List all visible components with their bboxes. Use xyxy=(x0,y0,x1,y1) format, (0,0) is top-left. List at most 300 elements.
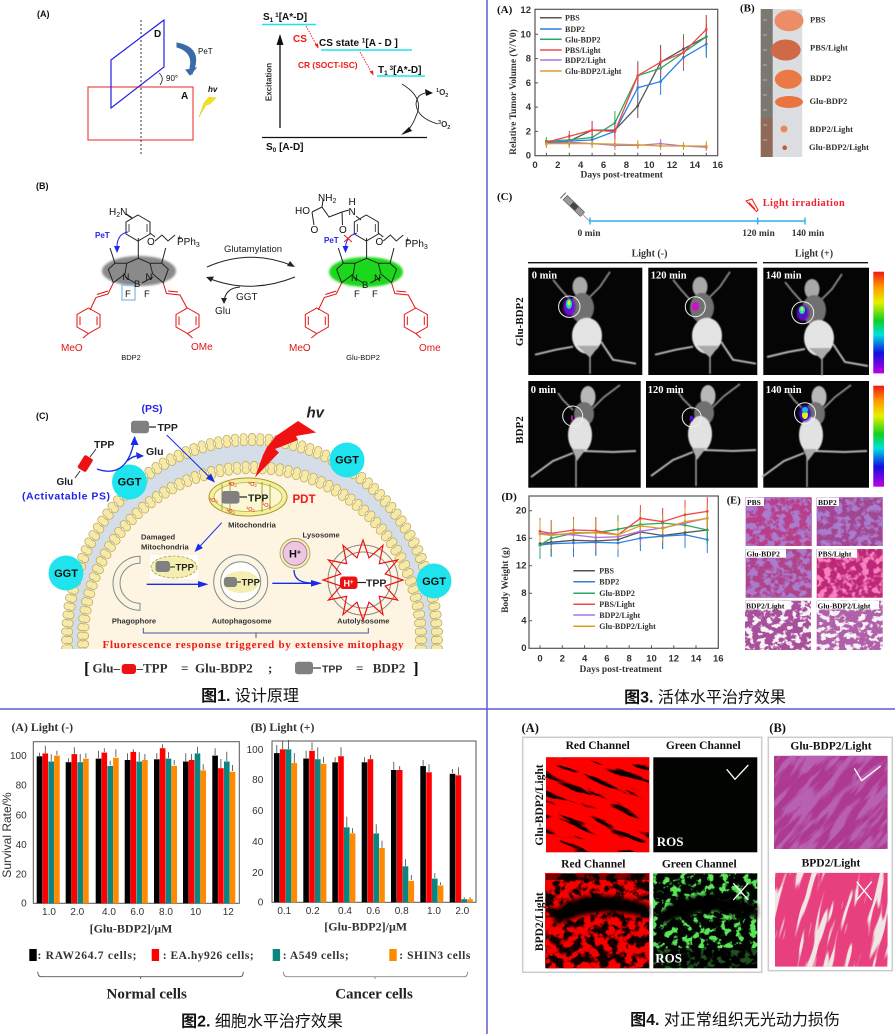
chart: body weight: 12 xyxy=(669,654,679,664)
chart legend xyxy=(540,14,622,76)
molecule BDP2: N xyxy=(120,207,127,218)
chart: body weight: 6 xyxy=(604,654,610,664)
mitochondria with singlet oxygen: 2 xyxy=(269,504,272,509)
mitochondria with singlet oxygen: 1 xyxy=(246,505,249,510)
formula legend xyxy=(84,659,419,678)
panel B label: (B) xyxy=(769,721,786,735)
bar chart: light off: 8.0 xyxy=(159,907,173,918)
mitochondria with singlet oxygen: TPP xyxy=(248,492,268,504)
bar chart: light on: 1.0 xyxy=(427,906,441,917)
chart legend: Glu-BDP2 xyxy=(565,35,601,44)
diagram: orthogonal donor acceptor planes xyxy=(88,20,213,154)
mitochondria with singlet oxygen: 2 xyxy=(235,483,238,488)
activatable PS converted to PS: Glu xyxy=(56,477,73,488)
histology: Glu-BDP2 xyxy=(746,549,812,598)
phagophore xyxy=(113,556,140,610)
GGT enzymes xyxy=(48,442,452,598)
bar chart: light on xyxy=(247,740,476,934)
autophagosome xyxy=(214,555,268,609)
molecule BDP2: O xyxy=(147,237,155,248)
chart: body weight: 4 xyxy=(521,616,527,626)
panel A frame and ROS images xyxy=(522,736,762,973)
molecule Glu-BDP2: 2 xyxy=(332,198,336,205)
panel E label: (E) xyxy=(727,496,741,506)
molecule Glu-BDP2: HO xyxy=(295,206,310,217)
molecule BDP2: + xyxy=(177,233,182,242)
autolysosome with fluorescence burst: TPP xyxy=(366,578,386,590)
chart legend: Glu-BDP2/Light xyxy=(599,622,656,631)
legend cell lines: : SHIN3 cells xyxy=(399,950,471,962)
molecule Glu-BDP2: N xyxy=(351,273,358,284)
chart legend: PBS xyxy=(599,566,615,576)
bar chart: light on: 100 xyxy=(247,745,264,756)
legend cell lines: : RAW264.7 cells; xyxy=(38,950,136,962)
molecule Glu-BDP2: O xyxy=(339,225,347,236)
GGT enzymes: GGT xyxy=(335,454,359,466)
formula legend: = xyxy=(181,661,188,676)
mitochondria with singlet oxygen: 2 xyxy=(255,483,258,488)
bar chart: light on: 20 xyxy=(252,868,264,879)
mitochondria with singlet oxygen: 1 xyxy=(262,501,265,506)
molecule Glu-BDP2: + xyxy=(405,235,410,244)
panel C treatment timeline: Light irradiation xyxy=(763,198,845,209)
lysosome: + xyxy=(297,550,301,556)
chart: relative tumor volume: 2 xyxy=(555,160,560,171)
mitochondria with singlet oxygen xyxy=(209,478,287,516)
molecule Glu-BDP2: F xyxy=(372,289,378,300)
icon: laser pointer xyxy=(746,199,758,212)
panel C treatment timeline xyxy=(497,191,868,444)
histology: Glu-BDP2/Light xyxy=(817,601,883,650)
formula legend: –TPP xyxy=(136,661,168,676)
imaging: BDP2 120 min: 120 min xyxy=(648,385,684,396)
molecule BDP2: F xyxy=(144,289,150,300)
panel A frame and ROS images: BPD2/Light xyxy=(534,892,546,951)
chart: relative tumor volume: 16 xyxy=(712,160,723,171)
chart: body weight: Body Weight (g) xyxy=(500,547,511,613)
histology: BDP2/Light xyxy=(745,601,811,650)
chart: body weight: 12 xyxy=(516,560,526,572)
group bracket cancer cells xyxy=(283,972,468,1002)
panel C treatment timeline: Light (-) xyxy=(632,248,667,260)
chart: relative tumor volume: 14 xyxy=(690,160,701,171)
imaging: Glu-BDP2 0 min: 0 min xyxy=(532,270,557,282)
lysosome: Lysosome xyxy=(302,530,340,540)
panel: figure 4 no dark phototoxicity xyxy=(522,723,893,1027)
legend cell lines: : EA.hy926 cells; xyxy=(163,950,254,962)
fluorescence caption: Fluorescence response triggered by extensive mitophagy xyxy=(102,639,404,651)
panel C treatment timeline: (C) xyxy=(497,191,513,203)
reaction arrows glutamylation and GGT: GGT xyxy=(236,292,258,303)
energy level diagram: 1 xyxy=(436,88,439,94)
energy level diagram: 2 xyxy=(445,93,448,99)
chart: relative tumor volume: 4 xyxy=(578,160,584,171)
panel B excised tumors: BDP2 xyxy=(810,73,831,83)
histology: PBS/Light: PBS/Light xyxy=(818,550,852,559)
bar chart: light off: [Glu-BDP2]/μM xyxy=(90,922,172,936)
organelle labels: Autophagosome xyxy=(212,616,272,625)
imaging: BDP2 0 min: 0 min xyxy=(531,385,556,396)
formula legend: BDP2 xyxy=(373,661,405,676)
damaged mitochondrion xyxy=(150,555,198,579)
molecule BDP2: H xyxy=(109,207,116,218)
energy level diagram: O xyxy=(441,120,447,129)
chart legend: BDP2 xyxy=(599,578,619,586)
mitochondria with singlet oxygen: 2 xyxy=(216,499,219,504)
panel B excised tumors: Glu-BDP2 xyxy=(810,96,847,106)
icon: red lightning hv xyxy=(255,404,326,478)
energy level diagram: 1 xyxy=(362,38,366,44)
bar chart: light on: 0.4 xyxy=(338,906,352,917)
bar chart: light on: 0 xyxy=(258,898,264,908)
molecule BDP2: MeO xyxy=(61,343,83,354)
molecule Glu-BDP2: Glu-BDP2 xyxy=(346,353,380,362)
panel A frame and ROS images: Green Channel xyxy=(662,858,737,870)
chart: body weight: 14 xyxy=(691,654,702,664)
imaging: BDP2 120 min xyxy=(646,381,758,488)
energy level diagram: T xyxy=(378,65,384,76)
organelle labels: Autolysosome xyxy=(337,616,389,625)
bar chart: light off: 4.0 xyxy=(102,907,116,918)
autolysosome with fluorescence burst xyxy=(323,540,403,620)
energy level diagram: [A*-D] xyxy=(393,65,421,76)
icon: syringe xyxy=(560,193,592,224)
imaging: BDP2 0 min xyxy=(528,381,641,488)
chart legend: PBS/Light xyxy=(599,600,635,609)
chart: body weight: 8 xyxy=(521,588,526,599)
color scale bottom xyxy=(873,386,884,487)
formula legend: ] xyxy=(413,659,419,678)
chart: body weight xyxy=(500,496,724,675)
panel C treatment timeline: BDP2 xyxy=(514,416,526,444)
chart legend: Glu-BDP2/Light xyxy=(565,67,622,76)
caption figure 4: 图4. 对正常组织无光动力损伤 xyxy=(630,1011,840,1029)
damaged mitochondrion: TPP xyxy=(176,562,195,574)
molecule BDP2: 2 xyxy=(116,212,120,219)
chart: relative tumor volume: Relative Tumor Volume (V/V0) xyxy=(508,29,519,155)
mitochondria with singlet oxygen: O xyxy=(211,498,216,504)
energy level diagram: CS xyxy=(293,34,307,45)
lysosome: H xyxy=(289,548,297,560)
panel B excised tumors: PBS xyxy=(810,14,826,24)
chart: body weight: 20 xyxy=(516,506,526,516)
histology: Glu-BDP2/Light: Glu-BDP2/Light xyxy=(818,602,871,610)
reaction arrows glutamylation and GGT xyxy=(206,244,295,317)
confocal: red channel bottom xyxy=(545,873,649,968)
bar chart: light off: 20 xyxy=(16,870,27,880)
group bracket normal cells xyxy=(38,972,243,1002)
icon: light bolt hv xyxy=(199,85,218,117)
chart: body weight: 0 xyxy=(521,643,526,654)
chart: relative tumor volume: Days post-treatment xyxy=(580,170,664,180)
bar chart: light on: 0.1 xyxy=(277,906,292,917)
chart: relative tumor volume: 12 xyxy=(520,5,531,16)
molecule BDP2: OMe xyxy=(191,342,213,353)
caption figure 1: 图1. 设计原理 xyxy=(201,687,299,705)
diagram: orthogonal donor acceptor planes: 90° xyxy=(166,74,178,83)
chart: relative tumor volume: 8 xyxy=(624,160,629,171)
confocal: red channel top xyxy=(546,757,650,852)
molecule Glu-BDP2: F xyxy=(354,289,360,300)
panel B excised tumors: PBS/Light xyxy=(810,42,848,52)
panel B frame and histology: Glu-BDP2/Light xyxy=(790,740,872,752)
chart: relative tumor volume: 2 xyxy=(526,126,531,138)
imaging: Glu-BDP2 120 min xyxy=(648,268,757,375)
panel B excised tumors: (B) xyxy=(740,2,755,14)
mitochondria with singlet oxygen: 1 xyxy=(248,480,251,485)
panel A frame and ROS images: Glu-BDP2/Light xyxy=(534,764,546,846)
imaging: Glu-BDP2 140 min xyxy=(763,268,869,376)
molecule Glu-BDP2: Ome xyxy=(419,343,441,354)
panel label B: (B) xyxy=(36,181,48,191)
chart: body weight: 16 xyxy=(516,533,526,544)
chart: body weight: Days post-treatment xyxy=(579,665,663,675)
energy level diagram: 3 xyxy=(438,120,441,126)
autophagosome: TPP xyxy=(242,578,261,588)
molecule Glu-BDP2: MeO xyxy=(289,343,311,354)
formula legend: Glu– xyxy=(92,661,120,676)
label PDT: PDT xyxy=(292,494,316,506)
panel C treatment timeline: Glu-BDP2 xyxy=(514,297,526,346)
molecule BDP2 xyxy=(61,207,213,362)
molecule Glu-BDP2: B xyxy=(362,280,368,291)
legend cell lines xyxy=(29,949,471,962)
energy level diagram: Excitation xyxy=(264,63,274,101)
molecule Glu-BDP2: PeT xyxy=(324,236,339,245)
molecule BDP2: F xyxy=(125,289,131,300)
icon: red lightning hv: hv xyxy=(306,404,326,422)
panel: figure 1 design principle xyxy=(22,10,452,703)
mitochondria with singlet oxygen: O xyxy=(264,503,269,509)
activatable PS converted to PS: TPP xyxy=(94,439,114,451)
panel A label: (A) xyxy=(522,721,539,735)
energy level diagram: S xyxy=(263,12,270,23)
formula legend: Glu-BDP2 xyxy=(195,661,253,676)
bar chart: light off xyxy=(0,742,239,936)
panel B excised tumors: Glu-BDP2/Light xyxy=(809,142,869,152)
arrow to damaged mitochondria xyxy=(194,523,222,552)
chart: relative tumor volume: 8 xyxy=(526,54,531,64)
chart: relative tumor volume: 4 xyxy=(526,102,532,113)
histology: PBS xyxy=(746,497,812,546)
energy level diagram: S xyxy=(266,142,273,153)
cell membrane lipid bilayer xyxy=(61,433,443,649)
bar chart: light on: 2.0 xyxy=(455,906,470,917)
chart: relative tumor volume: 10 xyxy=(644,160,654,171)
chart: body weight: 2 xyxy=(560,654,565,664)
GGT enzymes: GGT xyxy=(118,476,142,488)
chart legend: Glu-BDP2 xyxy=(599,589,635,598)
bar chart: light off: 100 xyxy=(10,751,27,762)
chart legend: BDP2/Light xyxy=(565,56,606,65)
energy level diagram: [A - D ] xyxy=(365,38,398,49)
color scale top xyxy=(873,272,884,373)
chart: relative tumor volume: 12 xyxy=(667,160,677,171)
panel A frame and ROS images: Red Channel xyxy=(561,858,625,870)
GGT enzymes: GGT xyxy=(422,576,446,588)
bar chart: light off: 1.0 xyxy=(42,907,56,918)
bar chart: light off: 2.0 xyxy=(70,907,85,918)
molecule BDP2: PeT xyxy=(95,231,110,240)
imaging: Glu-BDP2 120 min: 120 min xyxy=(651,270,687,282)
panel B frame and histology xyxy=(768,736,893,972)
arrows to autolysosome xyxy=(272,570,322,587)
chart: body weight: 16 xyxy=(713,654,724,664)
organelle labels: Phagophore xyxy=(112,616,156,625)
histology: BPD2/Light heart xyxy=(775,872,888,967)
panel D label: (D) xyxy=(502,491,517,503)
formula legend: ; xyxy=(268,661,272,676)
energy level diagram: [A-D] xyxy=(276,142,304,153)
mitochondria with singlet oxygen: 1 xyxy=(228,480,231,485)
bar chart: light off: 80 xyxy=(16,780,27,792)
label mitochondria: Mitochondria xyxy=(228,520,277,530)
energy level diagram xyxy=(262,12,450,154)
chart legend xyxy=(573,566,656,631)
GGT enzymes: GGT xyxy=(54,568,78,580)
panel C treatment timeline: 120 min xyxy=(742,229,775,239)
energy level diagram: 3 xyxy=(388,65,394,72)
activatable PS converted to PS: (Activatable PS) xyxy=(22,490,110,502)
mitochondria with singlet oxygen: O xyxy=(228,509,233,515)
panel C treatment timeline: 0 min xyxy=(578,229,601,239)
chart: body weight: 8 xyxy=(627,654,632,664)
group bracket normal cells: Normal cells xyxy=(107,986,187,1002)
bar chart: light off: 12 xyxy=(223,907,234,918)
confocal: green channel bottom xyxy=(653,873,757,968)
molecule BDP2: BDP2 xyxy=(121,353,141,362)
molecule Glu-BDP2 xyxy=(289,193,441,362)
legend cell lines: : A549 cells; xyxy=(283,950,349,962)
bar chart: light off: 60 xyxy=(16,810,27,822)
activatable PS converted to PS: (PS) xyxy=(142,403,162,415)
bar chart: light off: 40 xyxy=(16,840,27,851)
energy level diagram: 2 xyxy=(447,125,450,131)
mitochondria with singlet oxygen: O xyxy=(248,507,253,513)
bar chart: light off: 6.0 xyxy=(130,907,145,918)
lysosome xyxy=(280,530,340,568)
chart legend: PBS xyxy=(565,14,580,22)
diagram: orthogonal donor acceptor planes: A xyxy=(181,91,188,102)
mitochondria with singlet oxygen: 2 xyxy=(233,510,236,515)
bar chart: light on: 0.8 xyxy=(395,906,409,917)
activatable PS converted to PS: TPP xyxy=(158,422,178,434)
energy level diagram: CS state xyxy=(319,38,359,49)
bar chart: light on: 0.6 xyxy=(366,906,381,917)
panel C treatment timeline: Light (+) xyxy=(795,248,833,260)
formula legend: [ xyxy=(84,659,90,678)
icon: light bolt hv: hv xyxy=(208,85,218,94)
energy level diagram: 0 xyxy=(273,147,277,154)
histology: PBS: PBS xyxy=(747,498,761,507)
panel label C: (C) xyxy=(36,411,48,421)
bar chart: light on: 40 xyxy=(252,837,264,848)
panel label A: (A) xyxy=(37,9,50,19)
panel B excised tumors xyxy=(740,2,869,157)
diagram: orthogonal donor acceptor planes: D xyxy=(154,29,161,40)
autolysosome with fluorescence burst: H xyxy=(343,578,350,588)
label damaged mitochondria: Damaged xyxy=(141,532,175,542)
caption figure 3: 图3. 活体水平治疗效果 xyxy=(624,688,786,706)
confocal: green channel bottom: ROS xyxy=(655,951,682,966)
chart: body weight: 10 xyxy=(646,654,657,664)
reaction arrows glutamylation and GGT: Glu xyxy=(215,306,231,317)
reaction arrows glutamylation and GGT: Glutamylation xyxy=(224,244,282,255)
molecule Glu-BDP2: 3 xyxy=(424,244,428,251)
activatable PS converted to PS xyxy=(22,403,215,502)
molecule BDP2: N xyxy=(146,272,152,283)
chart: body weight: 4 xyxy=(582,654,588,664)
diagram: orthogonal donor acceptor planes: PeT xyxy=(198,47,213,56)
confocal: green channel top: ROS xyxy=(657,834,683,849)
molecule Glu-BDP2: PPh xyxy=(405,239,424,250)
chart: relative tumor volume: 0 xyxy=(526,150,531,162)
panel C treatment timeline: 140 min xyxy=(792,229,825,239)
panel B title: (B) Light (+) xyxy=(251,720,315,734)
molecule Glu-BDP2: N xyxy=(374,273,381,284)
imaging: Glu-BDP2 0 min xyxy=(528,268,642,375)
histology: Glu-BDP2/Light heart xyxy=(774,756,888,849)
energy level diagram: 1 xyxy=(273,12,279,19)
histology: BDP2: BDP2 xyxy=(818,498,837,507)
molecule BDP2: N xyxy=(122,272,130,283)
panel A frame and ROS images: Green Channel xyxy=(666,740,741,752)
chart: body weight: 0 xyxy=(537,654,543,664)
panel A label: (A) xyxy=(497,4,513,16)
energy level diagram: [A*-D] xyxy=(279,12,307,23)
molecule BDP2: PPh xyxy=(177,237,196,248)
icon: PeT curved arrow xyxy=(177,43,196,75)
molecule Glu-BDP2: NH xyxy=(318,193,332,204)
arrow phagophore to autophagosome xyxy=(147,581,208,588)
autolysosome with fluorescence burst: + xyxy=(350,580,354,586)
bar chart: light on: 80 xyxy=(252,775,264,786)
imaging: BDP2 140 min: 140 min xyxy=(766,385,802,396)
imaging: BDP2 140 min xyxy=(762,381,869,488)
molecule BDP2: B xyxy=(134,279,140,290)
panel A frame and ROS images: Red Channel xyxy=(566,740,630,752)
bar chart: light on: [Glu-BDP2]/μM xyxy=(324,920,407,934)
molecule Glu-BDP2: O xyxy=(310,225,318,236)
bar chart: light off: Survival Rate/% xyxy=(0,792,14,878)
bar chart: light off: 10 xyxy=(190,907,202,918)
histology: BDP2/Light: BDP2/Light xyxy=(746,602,785,610)
group bracket cancer cells: Cancer cells xyxy=(335,986,413,1002)
chart: relative tumor volume: 6 xyxy=(601,160,606,171)
energy level diagram: O xyxy=(439,88,445,97)
chart: relative tumor volume: 0 xyxy=(532,160,538,171)
label damaged mitochondria: Mitochondria xyxy=(141,542,189,552)
mitochondria with singlet oxygen: 1 xyxy=(226,507,229,512)
caption figure 2: 图2. 细胞水平治疗效果 xyxy=(181,1012,343,1030)
chart legend: PBS/Light xyxy=(565,46,601,55)
histology: BDP2 xyxy=(817,497,883,546)
molecule Glu-BDP2: O xyxy=(376,237,384,248)
imaging: Glu-BDP2 140 min: 140 min xyxy=(766,270,802,282)
histology: Glu-BDP2: Glu-BDP2 xyxy=(746,550,780,559)
mitochondria with singlet oxygen: O xyxy=(230,482,235,488)
panel: figure 2 cell level therapy xyxy=(0,720,476,1030)
panel B frame and histology: BPD2/Light xyxy=(802,858,861,870)
energy level diagram: 1 xyxy=(384,70,388,77)
formula legend: TPP xyxy=(322,664,342,676)
energy level diagram: 1 xyxy=(270,17,274,24)
energy level diagram: CR (SOCT-ISC) xyxy=(298,60,358,70)
mitochondria with singlet oxygen: 1 xyxy=(209,496,212,501)
chart: relative tumor volume xyxy=(508,5,723,180)
panel: figure 3 in vivo therapy xyxy=(497,2,884,706)
molecule Glu-BDP2: H xyxy=(348,197,356,208)
